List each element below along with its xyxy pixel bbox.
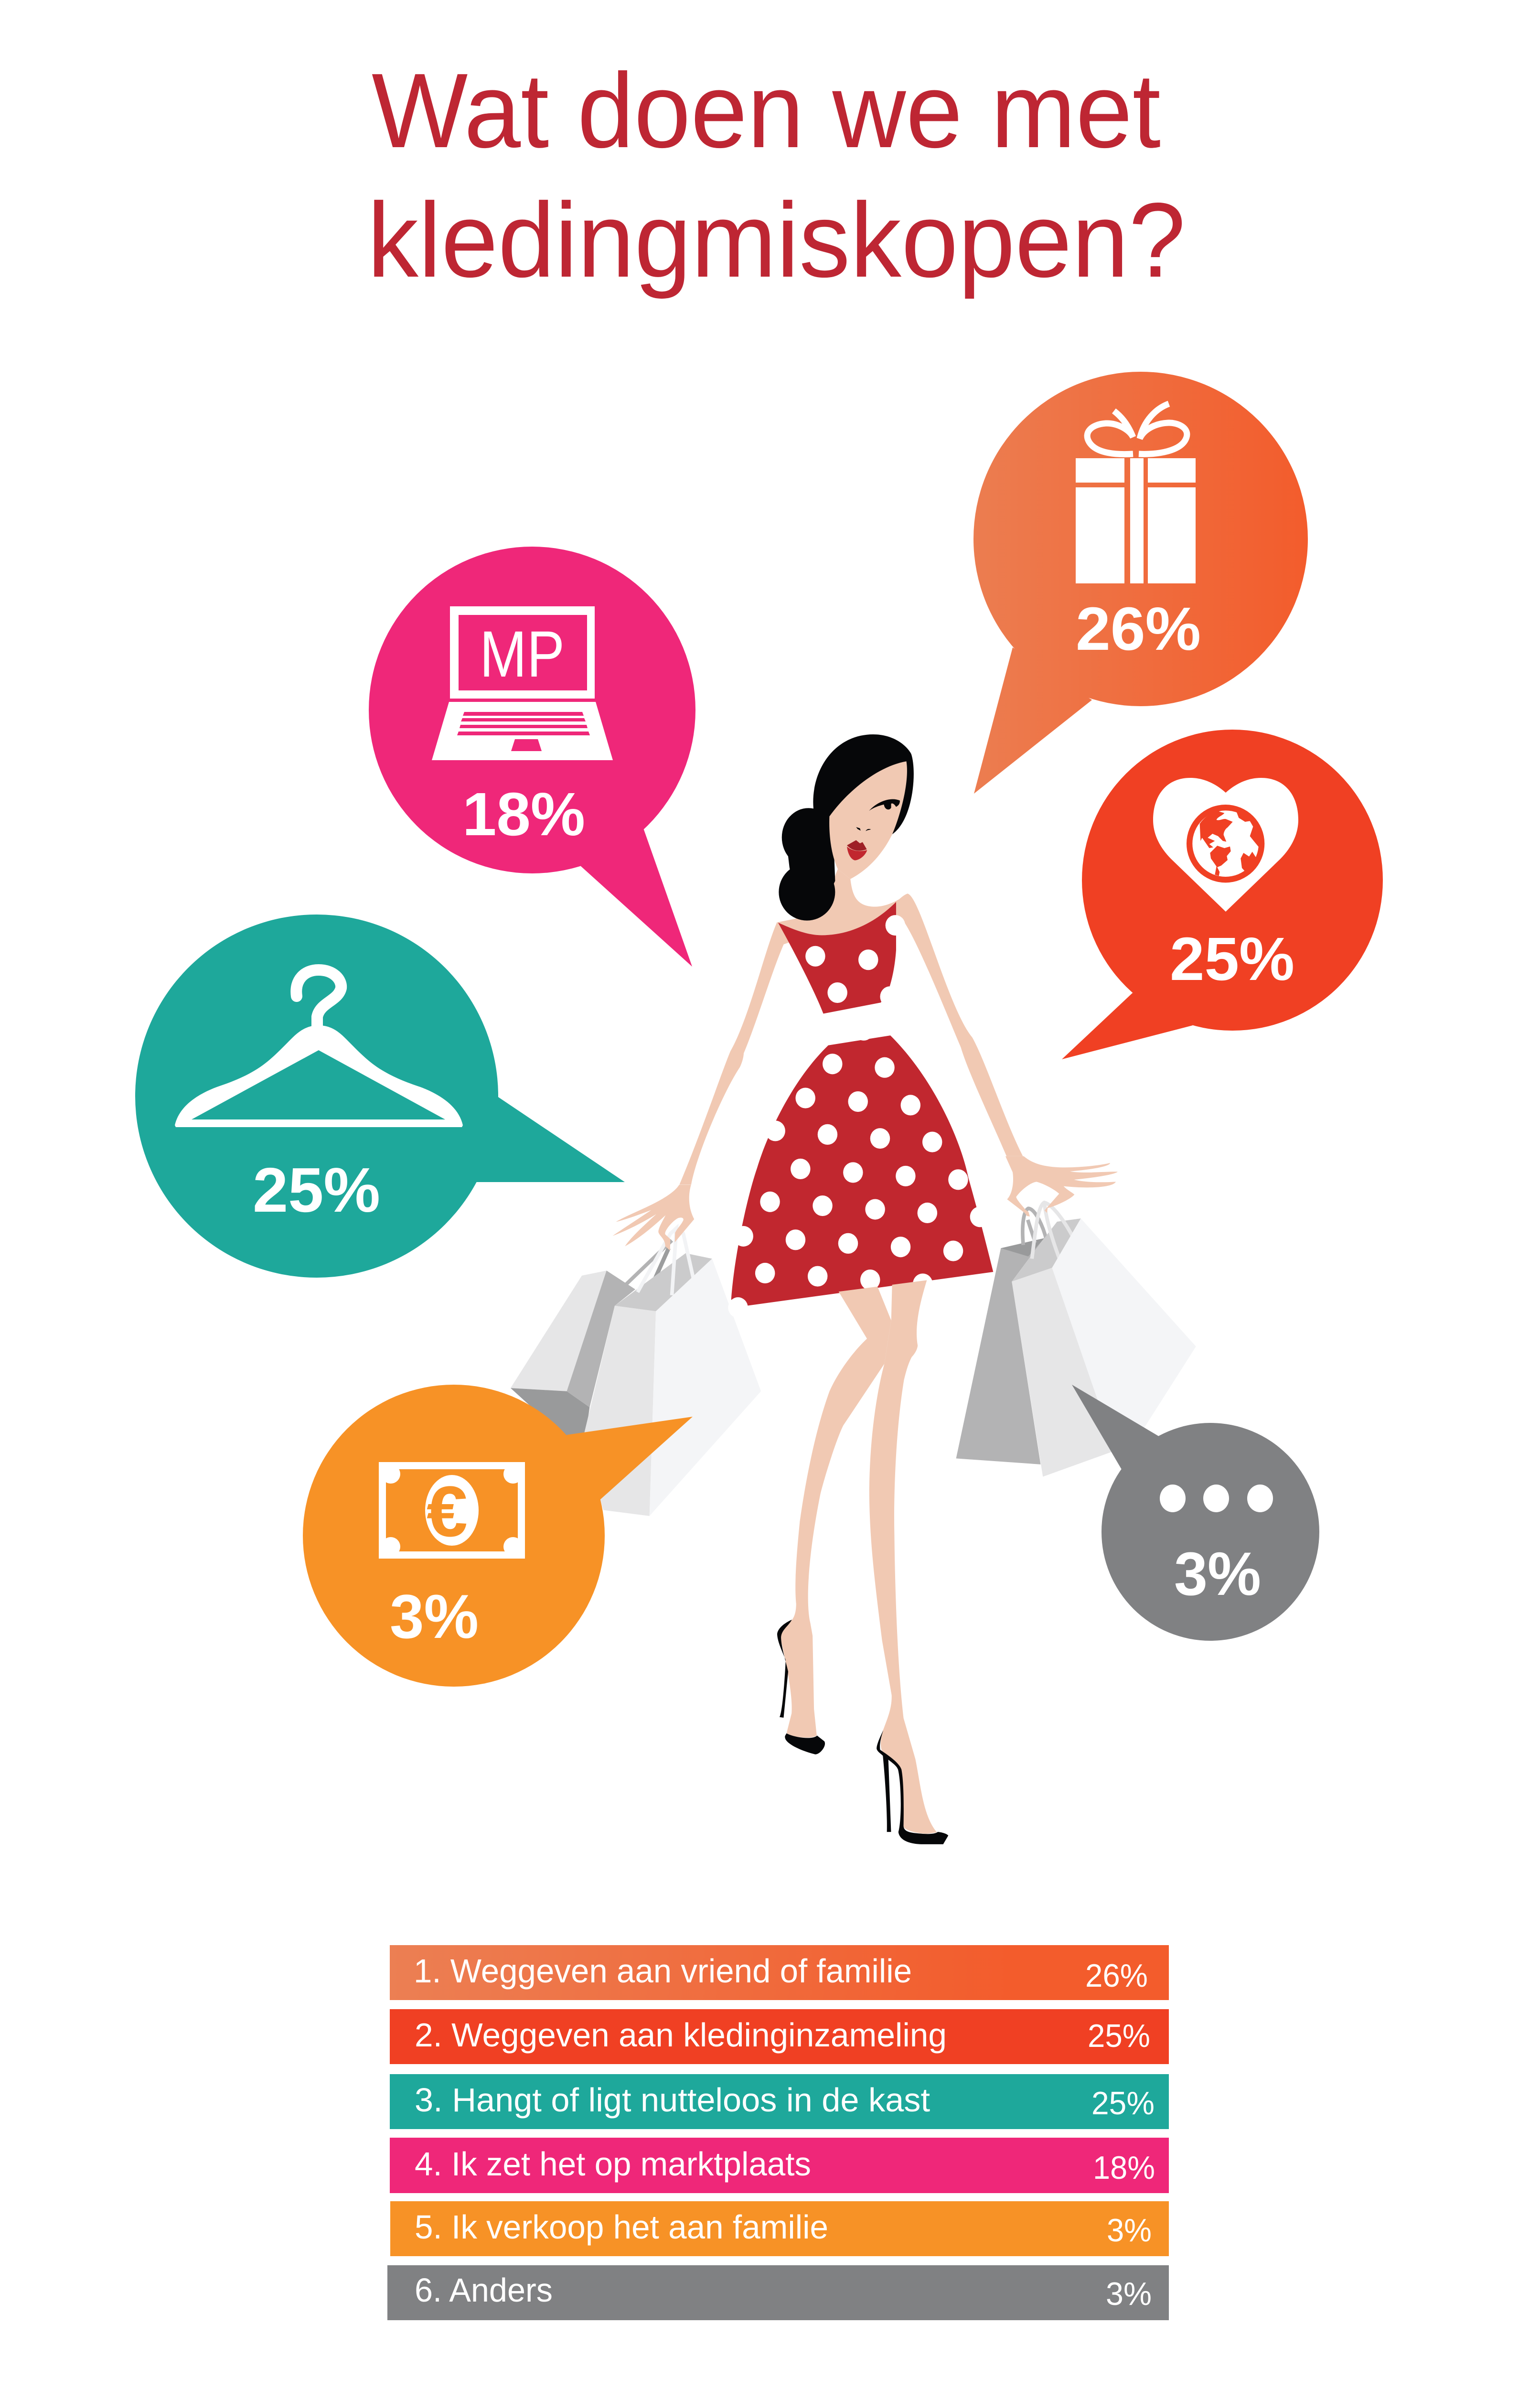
legs (781, 1280, 937, 1834)
face (829, 761, 907, 879)
title (367, 52, 1186, 300)
row 3: 3. Hangt of ligt nutteloos in de kast (415, 2081, 930, 2119)
row 5 (390, 2201, 1169, 2256)
value: 3% (1174, 1540, 1261, 1608)
icon: heart (1153, 778, 1298, 912)
row 6: 3% (1106, 2276, 1152, 2312)
row 1 (390, 1945, 1169, 2000)
value: 3% (390, 1582, 479, 1651)
row 3 (390, 2074, 1169, 2129)
shoes (777, 1620, 948, 1844)
facial features (847, 799, 900, 861)
arms and chest (679, 869, 1023, 1185)
icon: laptop (432, 606, 613, 760)
row 4: 18% (1093, 2150, 1155, 2186)
row 2 (390, 2009, 1169, 2064)
upper body and head (679, 734, 1023, 1318)
shopping bags right (956, 1203, 1196, 1477)
icon: hanger (175, 970, 463, 1127)
shopping bags left (511, 1228, 761, 1516)
row 2: 25% (1088, 2018, 1150, 2054)
row 5: 3% (1107, 2212, 1152, 2249)
speech bubble: heart globe 25% (1062, 730, 1383, 1059)
speech bubble: hanger 25% (135, 915, 625, 1278)
speech bubble: laptop 18% (369, 547, 695, 967)
row 1: 26% (1085, 1958, 1148, 1994)
icon: gift (1076, 404, 1196, 583)
value: 18% (462, 780, 585, 849)
icon: euro banknote (379, 1462, 525, 1559)
value: 25% (253, 1155, 380, 1225)
row 6 (387, 2265, 1169, 2320)
row 4: 4. Ik zet het op marktplaats (415, 2145, 811, 2183)
icon: three dots (1160, 1485, 1273, 1512)
icon: euro banknote: € (427, 1471, 468, 1551)
woman figure (612, 734, 1118, 1844)
hair (779, 734, 914, 921)
row 3: 25% (1091, 2085, 1155, 2121)
dress bodice (778, 902, 905, 1013)
row 1: 1. Weggeven aan vriend of familie (414, 1952, 912, 1990)
speech bubble: money 3% (303, 1385, 693, 1687)
title: Wat doen we met (372, 52, 1161, 170)
dress skirt (728, 1020, 993, 1318)
row 6: 6. Anders (415, 2271, 553, 2309)
right hand (1005, 1156, 1118, 1216)
value: 25% (1170, 925, 1294, 993)
speech bubble: gift 26% (973, 372, 1308, 794)
row 4 (390, 2138, 1169, 2193)
icon: laptop: MP (480, 618, 565, 691)
icon: globe (1187, 805, 1264, 882)
left hand (612, 1185, 694, 1250)
row 5: 5. Ik verkoop het aan familie (415, 2208, 828, 2246)
value: 26% (1076, 595, 1201, 663)
row 2: 2. Weggeven aan kledinginzameling (415, 2016, 947, 2054)
title: kledingmiskopen? (367, 181, 1186, 300)
speech bubble: other 3% (1072, 1385, 1319, 1641)
ranking list (387, 1945, 1169, 2320)
